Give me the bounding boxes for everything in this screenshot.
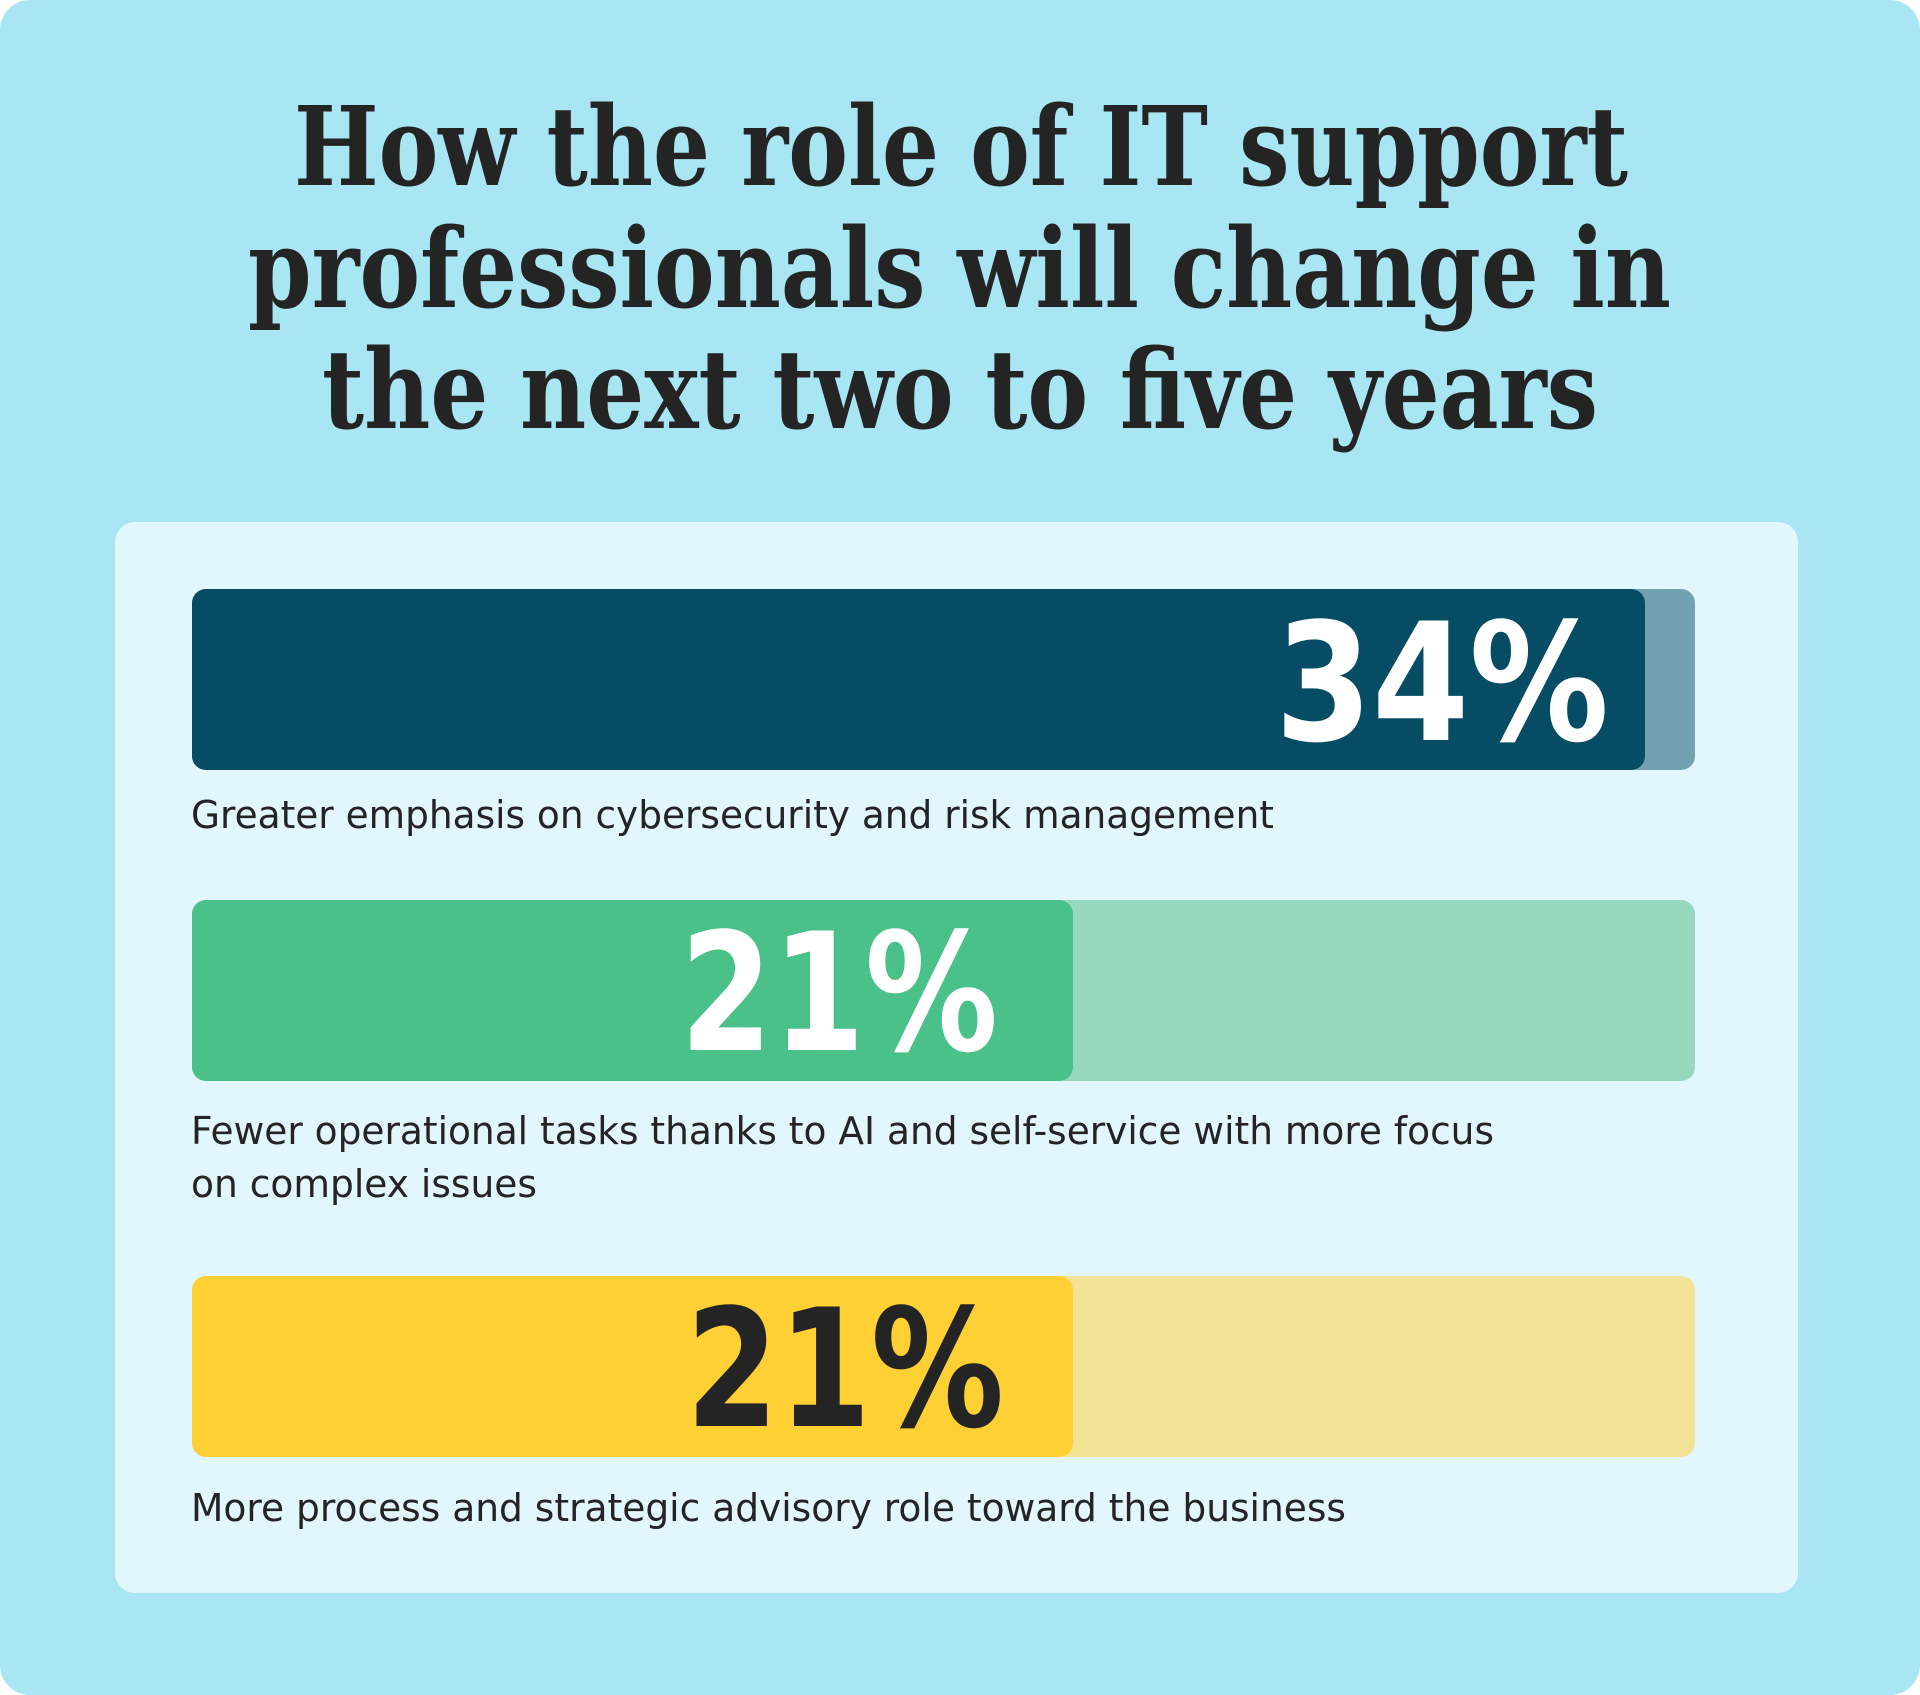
title	[248, 82, 1671, 454]
label: cybersecurity: Greater emphasis on cybersecurity and risk management	[191, 793, 1274, 837]
label: fewer operational tasks	[191, 1109, 1494, 1206]
label: strategic advisory: More process and strategic advisory role toward the business	[191, 1486, 1346, 1530]
bar: strategic advisory 21%: 21%	[686, 1274, 1004, 1465]
label: fewer operational tasks: Fewer operational tasks thanks to AI and self-service with more focus	[191, 1109, 1494, 1153]
title: the next two to five years	[322, 325, 1598, 454]
panel: survey results	[115, 522, 1798, 1593]
bar: strategic advisory 21%	[192, 1274, 1695, 1465]
bar: fewer operational tasks 21%	[192, 898, 1695, 1089]
label: fewer operational tasks: on complex issues	[191, 1162, 537, 1206]
bar: cybersecurity 34%: 34%	[1275, 588, 1609, 779]
title: How the role of IT support	[294, 82, 1628, 211]
bar: cybersecurity 34%	[192, 588, 1695, 779]
bar: fewer operational tasks 21%: 21%	[680, 898, 998, 1089]
title: professionals will change in	[248, 204, 1671, 333]
